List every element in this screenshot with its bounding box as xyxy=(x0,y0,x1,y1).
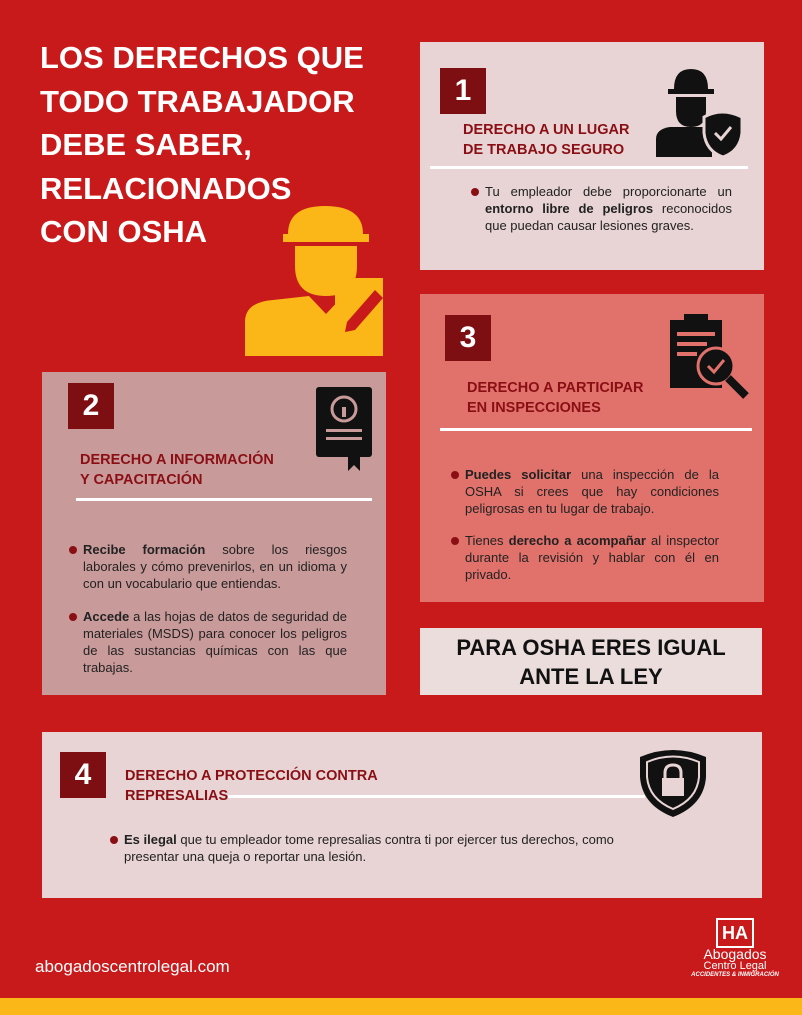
bullets 2: Recibe formación sobre los riesgos laborales y cómo prevenirlos, en un idioma y con un vocabulario que entiendas. xyxy=(83,542,347,591)
number 2: 2 xyxy=(83,389,99,422)
icon: yellow worker xyxy=(245,206,383,356)
logo: HA xyxy=(722,923,748,943)
title: TODO TRABAJADOR xyxy=(40,84,355,118)
panel 1 xyxy=(420,42,764,270)
title: RELACIONADOS xyxy=(40,170,291,206)
number 1: 1 xyxy=(455,74,471,107)
title: DEBE SABER, xyxy=(40,127,252,162)
heading 2 xyxy=(80,450,274,488)
number 4 xyxy=(60,752,106,798)
title xyxy=(40,40,364,249)
logo: Centro Legal xyxy=(704,960,766,972)
bullets 3: Puedes solicitar una inspección de la OSHA si crees que hay condiciones peligrosas en tu lugar de trabajo. xyxy=(465,467,719,516)
yellow footer bar xyxy=(0,998,802,1015)
heading 4: DERECHO A PROTECCIÓN CONTRA xyxy=(125,768,378,784)
panel 3: Tienes derecho a acompañar al inspector durante la revisión y hablar con él en privado. xyxy=(465,533,719,582)
callout: igual ante la ley xyxy=(420,628,762,695)
heading 3: DERECHO A PARTICIPAR xyxy=(467,380,643,396)
heading 1: DE TRABAJO SEGURO xyxy=(463,142,624,158)
icon: lock shield xyxy=(640,750,706,817)
number 1 xyxy=(440,68,486,114)
heading 4: REPRESALIAS xyxy=(125,788,228,804)
heading 1 xyxy=(463,122,630,158)
heading 4 xyxy=(125,766,378,804)
callout: igual ante la ley: ANTE LA LEY xyxy=(519,664,663,689)
title: LOS DERECHOS QUE xyxy=(40,40,364,75)
number 4: 4 xyxy=(75,758,91,791)
heading 2: DERECHO A INFORMACIÓN xyxy=(80,452,274,468)
number 3 xyxy=(445,315,491,361)
panel 2: Accede a las hojas de datos de seguridad de materiales (MSDS) para conocer los peligros de las sustancias químicas con las que trabajas. xyxy=(83,609,347,675)
website url: abogadoscentrolegal.com xyxy=(35,957,230,976)
number 3: 3 xyxy=(460,321,476,354)
heading 1: DERECHO A UN LUGAR xyxy=(463,122,629,138)
logo: Abogados xyxy=(703,946,767,962)
title: CON OSHA xyxy=(40,214,207,249)
number 2 xyxy=(68,383,114,429)
icon: book xyxy=(316,387,372,471)
panel 3 xyxy=(420,294,764,602)
logo xyxy=(691,918,779,978)
icon: worker shield xyxy=(656,69,741,157)
heading 3: EN INSPECCIONES xyxy=(467,400,601,416)
bullet 1: Tu empleador debe proporcionarte un entorno libre de peligros reconocidos que puedan causar lesiones graves. xyxy=(485,184,732,233)
callout: igual ante la ley: PARA OSHA ERES IGUAL xyxy=(456,635,726,660)
panel 4 xyxy=(42,732,762,898)
bullet 4: Es ilegal que tu empleador tome represalias contra ti por ejercer tus derechos, como presentar una queja o reportar una lesión. xyxy=(124,832,614,864)
panel 2 xyxy=(42,372,386,695)
heading 2: Y CAPACITACIÓN xyxy=(80,472,202,488)
heading 3 xyxy=(467,380,643,416)
logo: ACCIDENTES & INMIGRACIÓN xyxy=(691,972,779,978)
icon: clipboard magnifier xyxy=(670,314,749,399)
